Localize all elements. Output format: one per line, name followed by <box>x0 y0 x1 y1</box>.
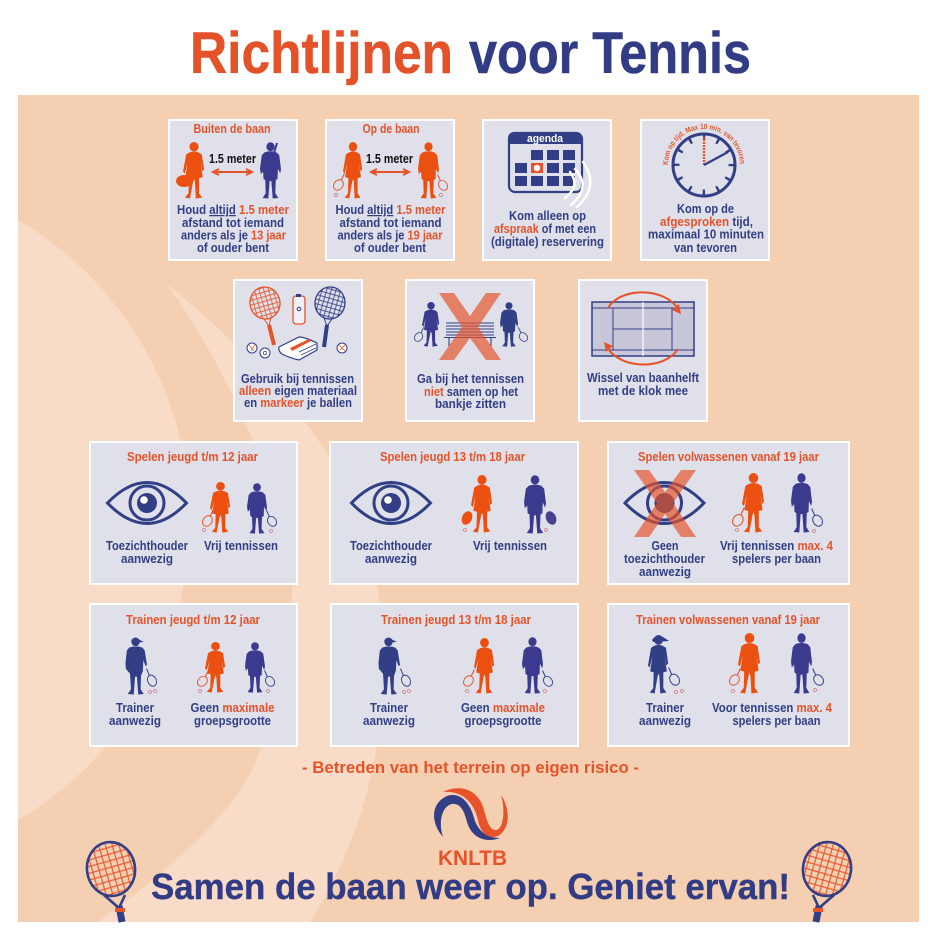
panel: spelen jeugd 13-18: Spelen jeugd 13 t/m 18 jaar <box>380 450 525 464</box>
figures <box>378 637 554 695</box>
panel: trainen jeugd t/m 12 <box>90 604 297 746</box>
figures <box>648 633 825 694</box>
title: voor Tennis <box>469 21 751 86</box>
text: aanwezig <box>639 714 691 728</box>
text: aanwezig <box>121 552 173 566</box>
text <box>336 203 446 255</box>
panel: klok <box>640 119 770 261</box>
panel: eigen materiaal <box>234 280 362 421</box>
panel: bankje <box>406 280 534 421</box>
text: aanwezig <box>109 714 161 728</box>
text: Voor tennissen max. 4 <box>712 701 832 715</box>
text: Trainer <box>116 701 154 715</box>
text: Trainer <box>370 701 408 715</box>
figures <box>730 473 824 532</box>
figures <box>460 475 558 534</box>
text <box>417 372 524 411</box>
text: Gebruik bij tennissen <box>241 372 354 386</box>
text <box>363 701 545 728</box>
icon: eye <box>108 482 186 524</box>
figures with bag <box>176 142 281 199</box>
logo: KNLTB: KNLTB <box>438 847 507 870</box>
icon: bench and figures <box>413 293 529 360</box>
panel: trainen volwassenen: Trainen volwassenen vanaf 19 jaar <box>636 613 820 627</box>
text: Wissel van baanhelft <box>587 371 700 385</box>
panel: trainen volwassenen <box>608 604 849 746</box>
panel: op de baan <box>326 120 454 260</box>
icon: right racket <box>799 839 855 922</box>
text: Geen <box>652 539 678 553</box>
title <box>190 21 751 86</box>
icon: left racket <box>83 839 139 922</box>
text: Trainer <box>646 701 684 715</box>
text: afspraak of met een <box>494 222 596 236</box>
panel: trainen jeugd t/m 12: Trainen jeugd t/m 12 jaar <box>126 613 260 627</box>
text: aanwezig <box>639 565 691 579</box>
text: Ga bij het tennissen <box>417 372 524 386</box>
text <box>624 539 833 579</box>
text <box>648 202 764 255</box>
text: anders als je 19 jaar <box>338 228 443 242</box>
text: afstand tot iemand <box>182 216 284 230</box>
text: of ouder bent <box>197 241 270 255</box>
text: Geen maximale <box>190 701 275 715</box>
panel: op de baan: Op de baan <box>362 122 420 136</box>
panel: trainen jeugd 13-18: Trainen jeugd 13 t/m 18 jaar <box>381 613 531 627</box>
panel: buiten de baan <box>169 120 297 260</box>
text: Houd altijd 1.5 meter <box>177 203 289 217</box>
panel: buiten de baan: 1.5 meter <box>209 152 256 166</box>
icon: crossed eye <box>625 470 704 537</box>
text: maximaal 10 minuten <box>648 228 764 242</box>
text: Kom alleen op <box>509 209 586 223</box>
arrow <box>213 169 252 175</box>
icon: eye <box>352 482 430 524</box>
text: Vrij tennissen max. 4 <box>720 539 833 553</box>
panel: spelen jeugd 13-18 <box>330 442 578 584</box>
text: Kom op de <box>677 202 734 216</box>
panel: spelen volwassenen: Spelen volwassenen vanaf 19 jaar <box>638 450 819 464</box>
logo: KNLTB <box>434 788 508 870</box>
text <box>587 371 700 398</box>
text <box>491 209 604 249</box>
text: niet samen op het <box>424 385 519 399</box>
text <box>109 701 275 728</box>
text: spelers per baan <box>732 714 820 728</box>
panel: spelen volwassenen <box>608 442 849 584</box>
text: aanwezig <box>363 714 415 728</box>
text: bankje zitten <box>435 397 506 411</box>
text: afstand tot iemand <box>340 216 442 230</box>
slogan: Samen de baan weer op. Geniet ervan! <box>151 866 790 907</box>
panel: spelen jeugd t/m 12 <box>90 442 297 584</box>
text: Vrij tennissen <box>204 539 278 553</box>
icon: court <box>592 292 694 365</box>
panel: op de baan: 1.5 meter <box>366 152 413 166</box>
text: Toezichthouder <box>350 539 432 553</box>
panel: spelen jeugd t/m 12: Spelen jeugd t/m 12 jaar <box>127 450 258 464</box>
text: van tevoren <box>674 241 737 255</box>
risk notice: - Betreden van het terrein op eigen risico - <box>302 758 639 777</box>
text: Toezichthouder <box>106 539 188 553</box>
panel: agenda <box>483 120 611 260</box>
text: anders als je 13 jaar <box>181 228 286 242</box>
text: toezichthouder <box>624 552 705 566</box>
text <box>639 701 832 728</box>
text: groepsgrootte <box>194 714 271 728</box>
icon: materials <box>247 285 347 360</box>
text <box>239 372 357 410</box>
panel: trainen jeugd 13-18 <box>331 604 578 746</box>
text: of ouder bent <box>354 241 427 255</box>
panel: buiten de baan: Buiten de baan <box>194 122 270 136</box>
text <box>177 203 289 255</box>
text: (digitale) reservering <box>491 235 604 249</box>
text: met de klok mee <box>598 384 688 398</box>
icon: calendar: agenda <box>527 133 564 145</box>
text: en markeer je ballen <box>244 396 352 410</box>
text: Vrij tennissen <box>473 539 547 553</box>
icon: clock: Kom op tijd. Max 10 min. van tevoren <box>662 124 744 165</box>
title: Richtlijnen <box>190 21 453 86</box>
text: groepsgrootte <box>464 714 542 728</box>
figures <box>201 482 278 534</box>
figures <box>125 637 276 695</box>
text: Geen maximale <box>461 701 545 715</box>
text: aanwezig <box>365 552 417 566</box>
text: spelers per baan <box>732 552 821 566</box>
text: Houd altijd 1.5 meter <box>336 203 446 217</box>
text <box>106 539 278 566</box>
arrow <box>371 169 409 175</box>
text: afgesproken tijd, <box>660 215 753 229</box>
text: alleen eigen materiaal <box>239 384 357 398</box>
panel: baanhelft <box>579 280 707 421</box>
text <box>350 539 547 566</box>
figures with rackets <box>332 142 449 199</box>
